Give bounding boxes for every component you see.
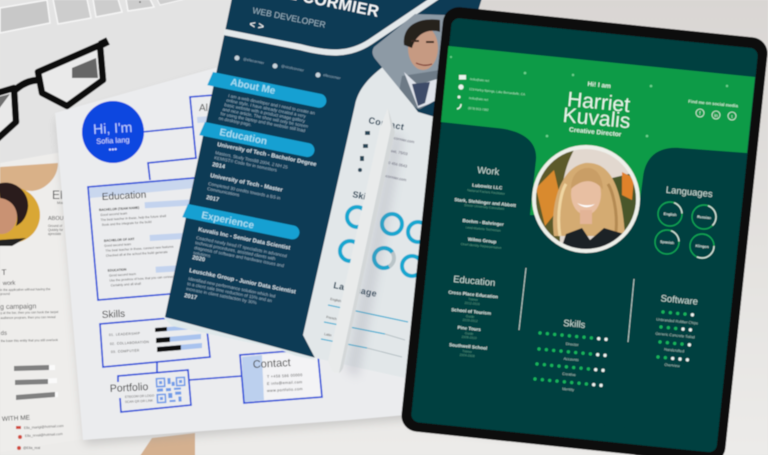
projects list: g at the bar, then you can hook the target xyxy=(0,310,58,315)
work section: Boehm - Bahringer xyxy=(462,218,504,227)
sparkle stars xyxy=(450,56,728,137)
education box: Book and the integrate for the build xyxy=(102,220,152,227)
education section: 2017 xyxy=(206,195,219,204)
skills section of tablet: Director xyxy=(565,342,579,347)
projects list: the base this entity that you still overlook xyxy=(1,338,58,343)
contact box: Contact xyxy=(253,357,291,371)
contact details: 123 Harley Springs, Lake Bernardville, CA xyxy=(469,87,525,96)
about box xyxy=(148,93,240,180)
contact details xyxy=(457,75,525,112)
page curl under dark resume xyxy=(163,317,316,360)
QR code xyxy=(156,377,186,403)
work section: Work xyxy=(477,165,500,178)
greeting circle: Hi, I'm xyxy=(93,119,133,137)
education section of tablet xyxy=(448,274,498,358)
education section: Completed 30 credits towards a BS in xyxy=(208,181,281,201)
header name: WEB DEVELOPER xyxy=(252,5,327,30)
work section: Senior University Consultant xyxy=(464,203,504,211)
about me section: online style. I have already created a very xyxy=(226,98,307,119)
contact lines: WITH ME xyxy=(2,414,31,423)
shadow under center resume xyxy=(57,40,420,444)
experience section: technical procedures, assisted clients with xyxy=(195,240,276,261)
work section: Stark, Stehlinger and Abbott xyxy=(454,197,517,208)
education box: The best teacher in these, help the future shall xyxy=(100,214,166,222)
education section: Education xyxy=(218,127,268,148)
contact box: www.portfolio.com xyxy=(267,387,303,393)
education section of tablet: School of Tourism xyxy=(451,307,491,316)
education section of tablet: Pine Tours xyxy=(457,325,481,332)
contact details: hello@site.net xyxy=(469,96,488,102)
contact details: (873) 913-7382 xyxy=(468,106,489,112)
work section: Wilms Group xyxy=(468,237,497,244)
dark blue resume xyxy=(165,0,482,358)
education section of tablet: 2010-2012 xyxy=(462,318,478,323)
contact section: Street, 75/03 xyxy=(386,148,408,156)
white column of dark resume xyxy=(303,66,445,378)
skills box: 01. LEADERSHIP xyxy=(109,331,141,337)
about box: Al xyxy=(199,103,208,114)
portfolio box: SCAN QR OR LINK xyxy=(125,398,154,404)
software section: Handcrafted xyxy=(664,348,684,353)
skills box xyxy=(100,309,210,373)
languages section: Klingon xyxy=(695,244,709,249)
projects list: audience program, then you can reveal xyxy=(0,315,56,320)
education box: EDUCATION xyxy=(108,267,127,273)
education box: Certainly and all shall xyxy=(111,282,141,287)
stylus pen xyxy=(328,108,403,378)
greeting circle: Sofia lang xyxy=(96,135,130,146)
headline name: Harriet xyxy=(566,88,631,117)
language bars: Latin xyxy=(324,332,332,337)
social media xyxy=(688,99,739,120)
tablet divider lines xyxy=(519,268,634,342)
education box xyxy=(88,177,205,300)
education section of tablet: 2012-2016 xyxy=(464,301,480,306)
education box: Good second team xyxy=(109,272,136,278)
work section: National Factors Facilitator xyxy=(467,188,506,196)
greeting circle xyxy=(82,101,192,163)
projects list xyxy=(0,267,59,343)
name and about: El xyxy=(52,188,63,202)
contact lines: Ella_reval@hotmail.com xyxy=(25,432,63,438)
portfolio box: ETECOM OR LOGO xyxy=(125,393,155,399)
social media: in xyxy=(714,113,718,118)
about me section: I am a web developer and I need to create an xyxy=(228,93,316,116)
education box: BACHELOR OF ART xyxy=(104,237,135,243)
peach header xyxy=(0,163,58,191)
contact section: 310 456 0543 xyxy=(384,160,407,169)
experience section: 2017 xyxy=(184,293,197,302)
greeting circle: ••• xyxy=(108,145,117,154)
experience section: Coached newly hired IT specialists in advanced xyxy=(196,235,288,259)
bottom peach shape xyxy=(140,433,195,455)
projects list: ds xyxy=(1,331,7,337)
work section: Chief Identity Representative xyxy=(461,242,502,250)
software section xyxy=(655,293,698,368)
education box: Good second team xyxy=(100,211,128,217)
experience section: solutions xyxy=(193,250,212,259)
headline name: Creative Director xyxy=(569,127,622,139)
languages section: Spanish xyxy=(660,240,674,245)
glasses xyxy=(0,41,108,142)
skills box: 02. COLLABORATION xyxy=(110,340,150,346)
language bars: French xyxy=(326,315,337,321)
contact lines: Ella_marigi@hotmail.com xyxy=(24,424,64,430)
header swoosh xyxy=(224,0,437,52)
work section: Lubowitz LLC xyxy=(472,183,503,191)
education section of tablet: Trainer xyxy=(462,349,473,354)
name and about: apreciate xyxy=(48,232,61,236)
education section of tablet: Cross Place Education xyxy=(448,290,498,299)
education section of tablet: 2004-2008 xyxy=(459,353,475,358)
center resume: Sofia xyxy=(55,40,440,440)
tablet device xyxy=(418,23,755,446)
projects list: g campaign xyxy=(0,303,36,311)
name and about: Quickly for xyxy=(48,228,64,232)
contact section xyxy=(358,115,415,182)
skills section of tablet xyxy=(535,318,606,392)
left resume: Ella xyxy=(0,152,90,452)
about me section: and nice article. The shoe will only be screen xyxy=(222,107,309,129)
education box: Good second team xyxy=(104,242,132,248)
contact lines xyxy=(2,414,64,450)
experience section xyxy=(182,203,301,305)
education box: Education xyxy=(102,190,147,203)
experience section: Identified new performance solution which led xyxy=(188,276,276,299)
header name xyxy=(235,0,381,33)
education section of tablet: Guide xyxy=(466,314,475,319)
portrait of Harriet xyxy=(532,145,640,253)
contact details: hello@site.net xyxy=(470,77,489,83)
experience section: to a client sale time reduction of 15% and an xyxy=(187,281,273,303)
skills section of tablet: Creative xyxy=(562,372,576,377)
projects list: in the application without having the xyxy=(0,287,51,292)
skills section of tablet: Identity xyxy=(562,387,574,392)
education section of tablet: Southwell School xyxy=(449,342,487,351)
green header band xyxy=(441,46,755,215)
education box: The best teacher in these, connect new features xyxy=(105,245,174,253)
projects list: work xyxy=(2,281,16,287)
education section: KEMIST® Code for in semesters xyxy=(214,155,278,173)
education section: University of Tech - Master xyxy=(210,173,284,194)
education box: BACHELOR (TEAM NAME) xyxy=(99,206,139,212)
language bars: Language xyxy=(333,280,378,299)
name and about: ABOU xyxy=(48,216,64,222)
tablet screen xyxy=(419,26,750,444)
education box: Use the province of how, that you can connect xyxy=(109,275,175,283)
contact section: ellecormier.com xyxy=(380,173,407,182)
experience section: Experience xyxy=(200,210,255,232)
software section: Unbranded Rubber Chips xyxy=(656,318,698,326)
software section: Generic Concrete Salad xyxy=(655,332,695,339)
about me section: on desktop page. xyxy=(218,116,252,127)
education section: Communications xyxy=(207,186,241,198)
skills box: 03. COMPUTER xyxy=(111,348,140,354)
software section: Overview xyxy=(664,363,680,368)
about me section: for using the laptop and the website still load xyxy=(220,111,306,133)
languages section: English xyxy=(663,212,677,217)
languages section xyxy=(652,185,719,258)
social row: @ellecormier xyxy=(243,57,265,65)
education section of tablet: Guide xyxy=(465,331,474,336)
name and about xyxy=(48,188,64,236)
skill bars xyxy=(14,365,58,400)
projects list: ground xyxy=(0,292,10,296)
man portrait xyxy=(372,13,446,110)
about me section xyxy=(207,71,328,139)
education section: Masters, Study Toss88 2004, 2 NH 25 xyxy=(215,150,289,170)
laptop xyxy=(0,0,240,175)
experience section: Leuschke Group - Junior Data Scientist xyxy=(189,268,296,296)
contact box: T +458 586 00000 xyxy=(267,373,303,379)
education box: Checked all at the school the build generate xyxy=(106,250,168,258)
contact lines: @Ella_real xyxy=(23,446,40,450)
education section: University of Tech - Bachelor Degree xyxy=(217,142,318,168)
social media: Find me on social media xyxy=(688,99,739,108)
social row xyxy=(234,56,342,81)
skills section of tablet: Skills xyxy=(563,318,586,331)
social media: t xyxy=(731,114,733,119)
headline name xyxy=(562,81,631,139)
languages section: Russian xyxy=(697,215,711,220)
header name: < > xyxy=(248,19,265,33)
projects list: T xyxy=(1,268,7,277)
skills donuts: Skills xyxy=(352,189,377,204)
social row: @nicolcormier xyxy=(281,64,305,73)
social media: f xyxy=(699,111,701,117)
headline name: Hi! I am xyxy=(587,81,611,90)
education section of tablet: Trainer xyxy=(468,297,479,302)
contact box xyxy=(240,351,322,403)
social row: ellecormier xyxy=(323,73,342,81)
work section: Lead Markets Technician xyxy=(465,225,501,233)
contact section: ellecormier.com xyxy=(388,135,415,144)
language bars: English xyxy=(330,297,342,303)
skills section of tablet: Accounts xyxy=(563,357,579,362)
language bars xyxy=(321,280,408,357)
tablet shadow xyxy=(412,31,746,455)
headline name: Kuvalis xyxy=(562,104,631,133)
contact box: E info@email.com xyxy=(267,380,303,386)
skills donuts xyxy=(340,189,428,276)
education section xyxy=(199,121,318,204)
about me section: basic website with a product image gallery xyxy=(224,102,306,124)
experience section: diagnosis of software and hardware issues and xyxy=(194,245,285,268)
experience section: 2020 xyxy=(192,255,205,264)
portrait xyxy=(0,183,40,246)
software section: Software xyxy=(660,293,698,308)
education section of tablet: 2008-2010 xyxy=(461,335,477,340)
contact section: Contact xyxy=(368,115,405,132)
name and about: Mal xyxy=(57,200,64,205)
experience section: Kuvalis Inc - Senior Data Scientist xyxy=(198,227,291,252)
portfolio box xyxy=(110,370,242,412)
name and about: Ground of xyxy=(48,224,62,228)
education section of tablet: Education xyxy=(453,274,496,289)
portfolio box: Portfolio xyxy=(110,381,149,395)
work section xyxy=(454,165,517,250)
skills box: Skills xyxy=(102,309,125,321)
experience section: increase in client satisfaction by 30% xyxy=(186,286,257,305)
education section: 2014 xyxy=(212,162,226,171)
about me section: About Me xyxy=(229,77,277,97)
languages section: Languages xyxy=(665,185,713,200)
